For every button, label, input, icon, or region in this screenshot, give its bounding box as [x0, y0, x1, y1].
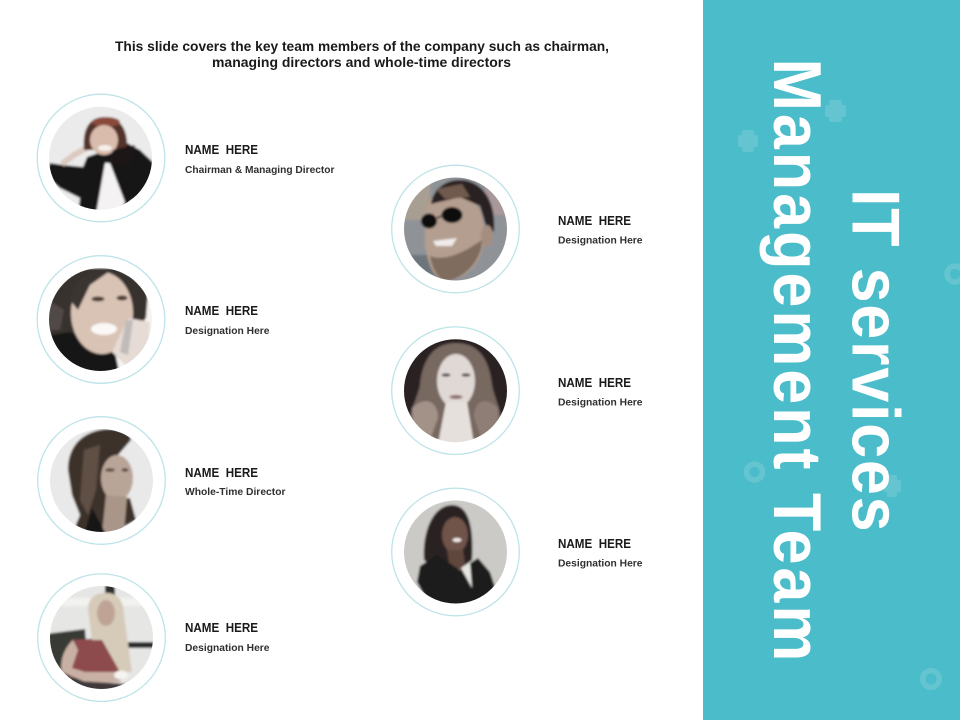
icon: decorative ring, right edge — [947, 266, 960, 282]
name and role: Designation Here — [185, 642, 270, 654]
name and role — [185, 143, 334, 176]
name and role: NAME HERE — [185, 621, 258, 635]
name and role: Designation Here — [185, 325, 270, 337]
name and role — [185, 304, 270, 337]
team member: Whole-Time Director — [38, 417, 286, 544]
icon: decorative ring, middle — [746, 464, 762, 480]
name and role: NAME HERE — [558, 376, 631, 390]
portrait: smiling woman on phone — [49, 268, 152, 371]
team member: designation, right column row 2 — [392, 327, 643, 455]
name and role: Designation Here — [558, 558, 643, 570]
name and role: Designation Here — [558, 396, 643, 408]
team member: designation, right column row 1 — [392, 165, 643, 293]
portrait: woman with wavy hair — [404, 339, 507, 442]
portrait: blonde woman in red top — [50, 586, 153, 689]
team member: designation, right column row 3 — [392, 488, 643, 616]
title: IT services Management Team: IT services — [838, 189, 914, 532]
icon: decorative plus, left — [738, 130, 758, 152]
name and role: NAME HERE — [558, 537, 631, 551]
panel: teal title sidebar — [703, 0, 960, 720]
team member: designation, row 4 — [38, 574, 270, 702]
name and role: NAME HERE — [185, 304, 258, 318]
title: IT services Management Team — [759, 58, 914, 661]
title: IT services Management Team: Management Team — [759, 58, 835, 661]
name and role: Designation Here — [558, 234, 643, 246]
icon: decorative plus, upper — [825, 100, 846, 122]
heading: slide description — [115, 38, 609, 70]
name and role: NAME HERE — [185, 466, 258, 480]
portrait: woman in black jacket — [49, 106, 152, 210]
name and role — [558, 214, 643, 246]
name and role: Whole-Time Director — [185, 486, 286, 498]
team member: Chairman and Managing Director — [37, 94, 334, 222]
portrait: laughing man in sunglasses — [404, 178, 507, 280]
icon: decorative plus, lower — [884, 475, 901, 497]
portrait: woman with long brown hair — [50, 429, 153, 532]
icon: decorative ring, bottom — [923, 671, 939, 687]
name and role — [558, 537, 643, 570]
portrait: woman in black blazer — [404, 500, 507, 604]
name and role: NAME HERE — [558, 214, 631, 228]
name and role — [185, 466, 286, 498]
team member: designation, row 2 — [37, 256, 270, 383]
name and role — [185, 621, 270, 654]
name and role — [558, 376, 643, 408]
heading: slide description: managing directors and whole-time directors — [212, 54, 511, 70]
heading: slide description: This slide covers the key team members of the company such as chairman, — [115, 38, 609, 54]
name and role: NAME HERE — [185, 143, 258, 157]
name and role: Chairman & Managing Director — [185, 164, 334, 176]
